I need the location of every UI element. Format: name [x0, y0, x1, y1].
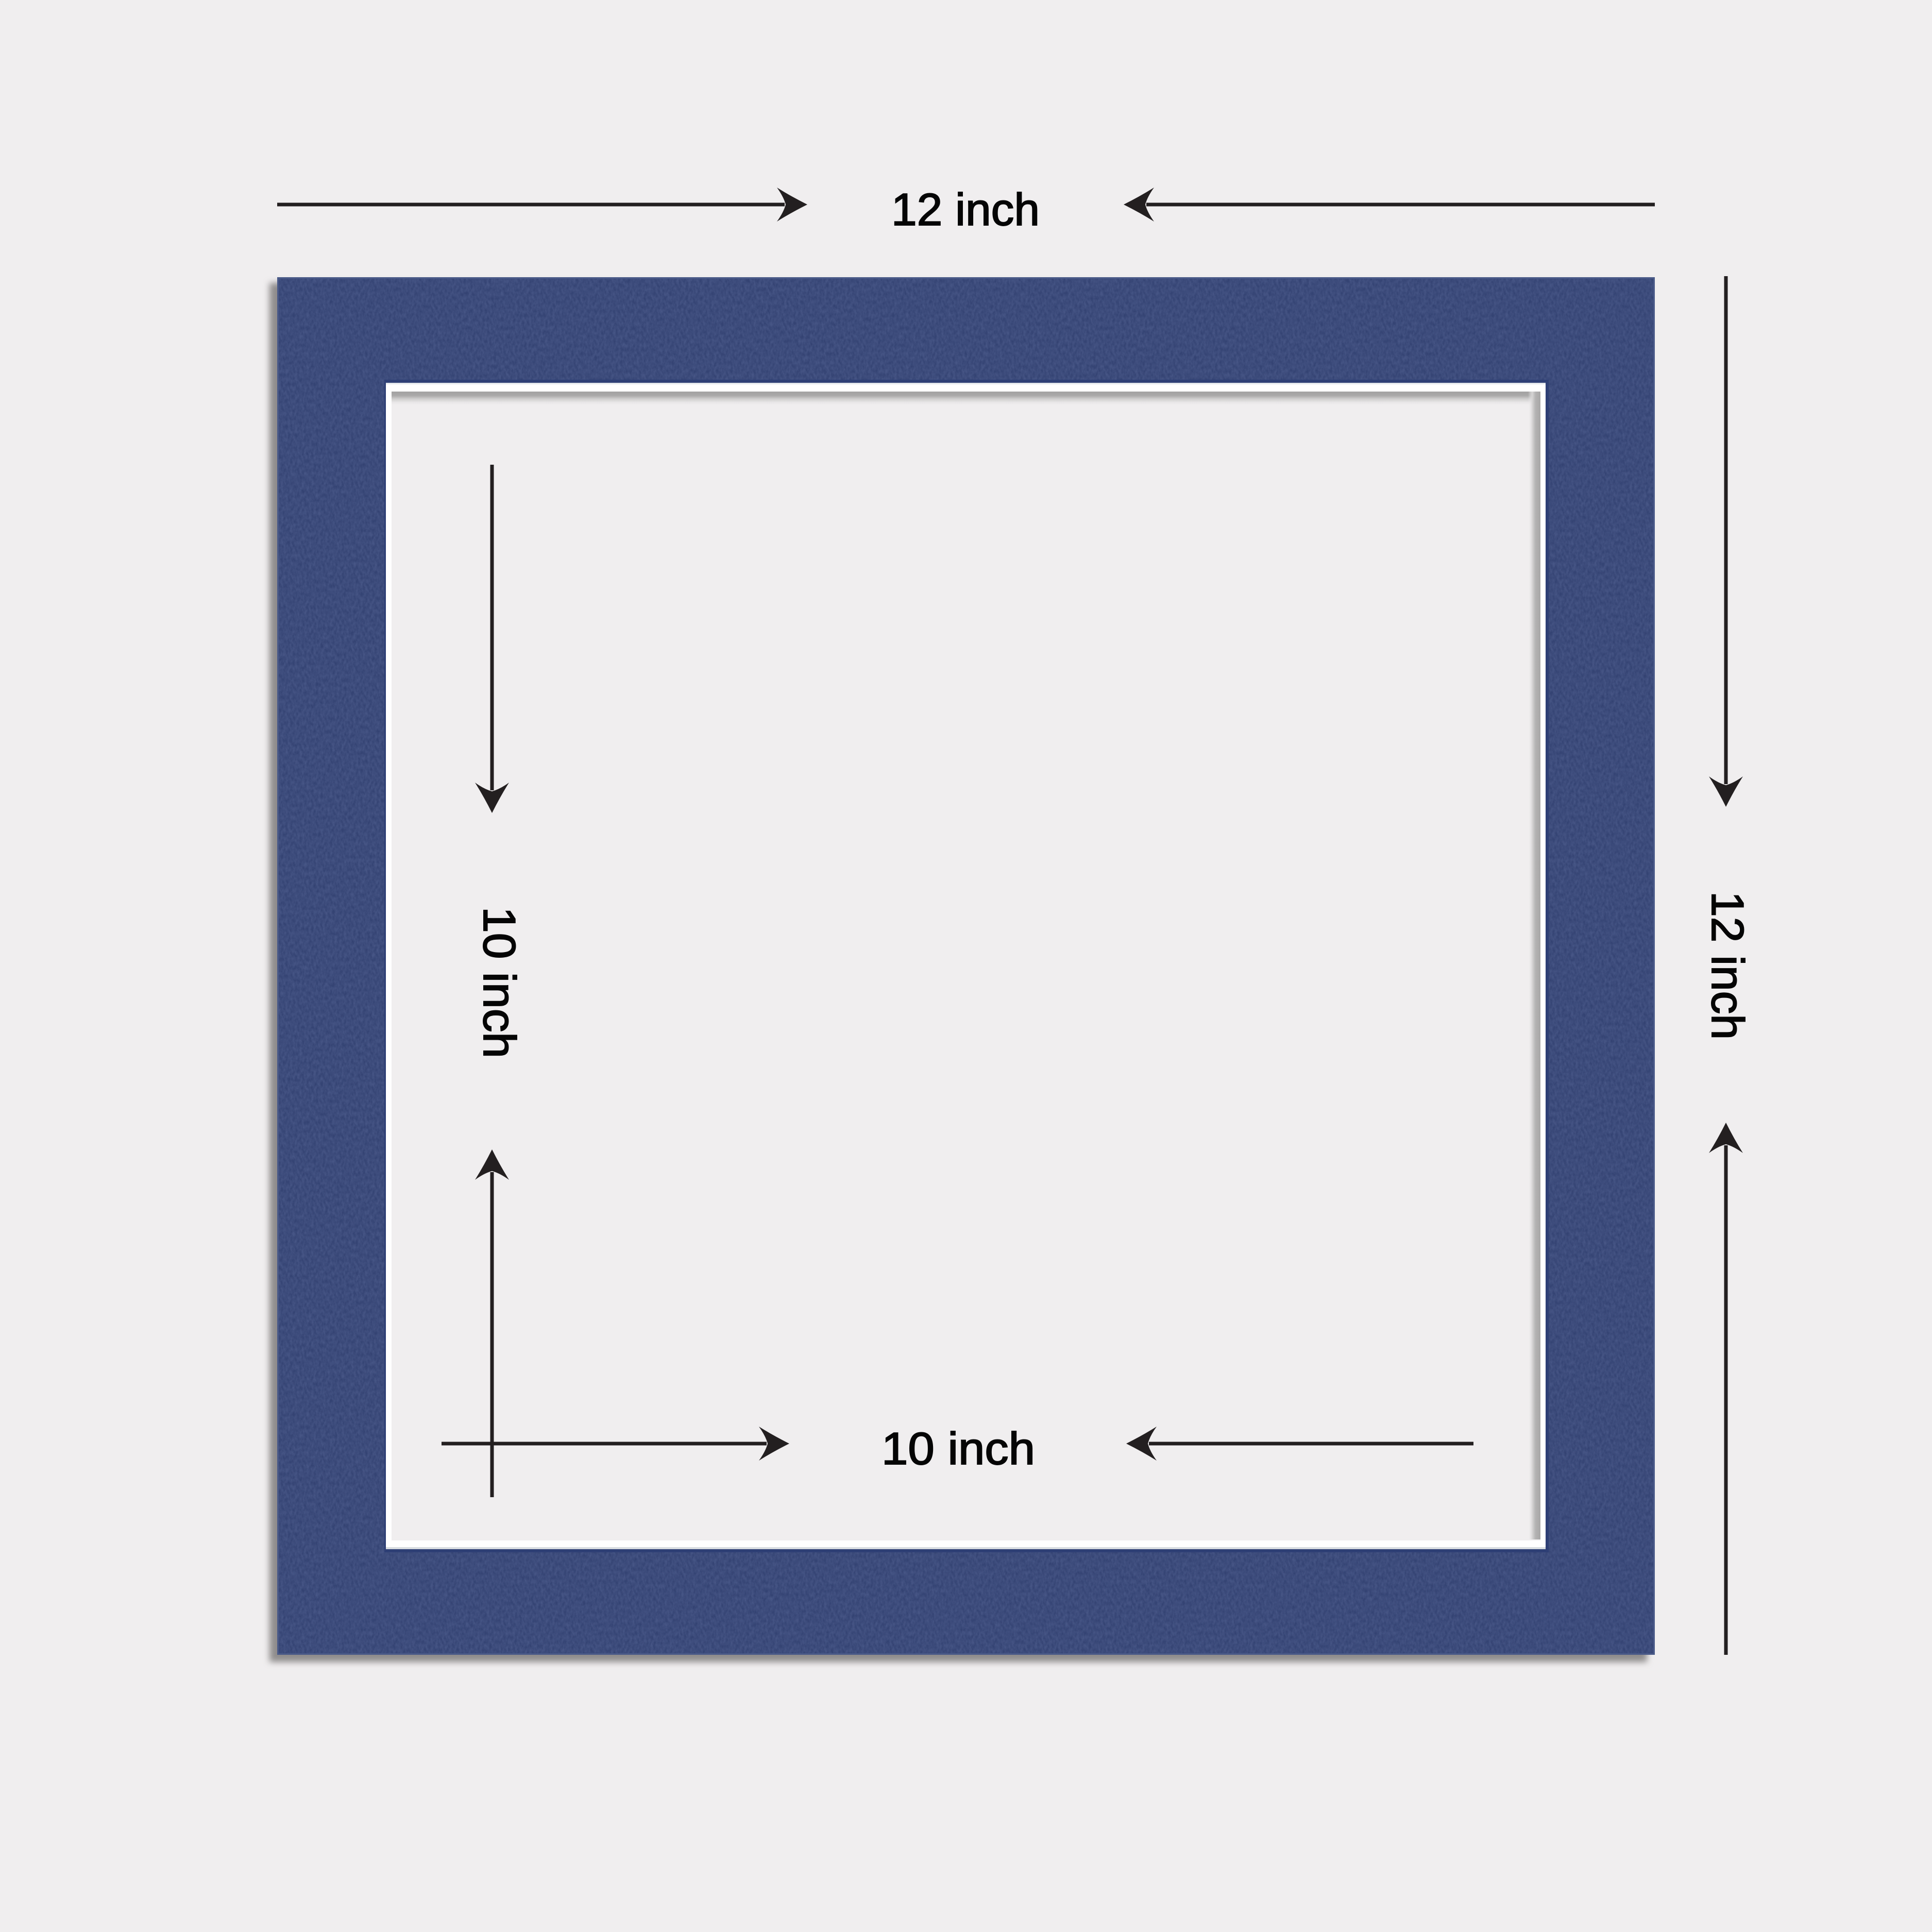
arrow: inner left lower, pointing up [475, 1149, 509, 1497]
right height label: 12 inch [1702, 891, 1753, 1040]
arrow: top left, pointing right [277, 188, 807, 222]
arrow: inner bottom right, pointing left [1126, 1427, 1473, 1461]
arrow: right lower, pointing up [1709, 1123, 1743, 1655]
window opening [386, 383, 1546, 1549]
inner width label: 10 inch [882, 1423, 1035, 1474]
arrow: inner left upper, pointing down [475, 465, 509, 813]
arrow: top right, pointing left [1124, 188, 1655, 222]
inner shadow [392, 392, 1540, 405]
white bevel [386, 383, 1546, 1549]
arrow: inner bottom left, pointing right [442, 1427, 789, 1461]
inner height label: 10 inch [474, 907, 525, 1058]
mat board shadow [269, 283, 1647, 1662]
top width label: 12 inch [891, 184, 1040, 235]
panel: navy mat board with opening [277, 277, 1655, 1655]
arrow: right upper, pointing down [1709, 276, 1743, 807]
mat board surface [277, 277, 1655, 1655]
